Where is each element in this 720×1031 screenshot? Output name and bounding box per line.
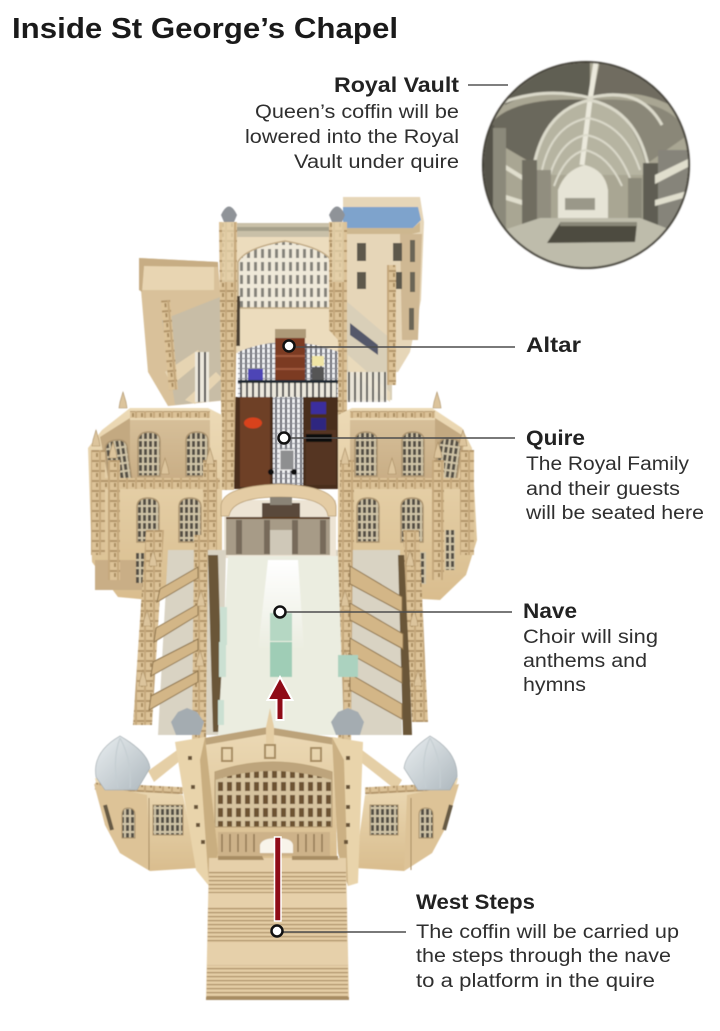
label: nave: Nave	[523, 600, 577, 623]
label: quire: Quire	[526, 427, 585, 450]
domes	[96, 708, 457, 790]
marker: altar	[284, 340, 515, 352]
label: quire: and their guests	[526, 479, 680, 500]
marker: nave	[274, 606, 512, 618]
label: west steps: West Steps	[416, 891, 535, 914]
arch and organ screen	[221, 484, 336, 558]
east right tower	[343, 197, 424, 402]
label: nave	[523, 600, 658, 696]
title: Inside St George’s Chapel	[12, 13, 398, 45]
label: royal vault: Royal Vault	[334, 74, 459, 97]
quire stalls and floor	[233, 397, 338, 489]
leader line: royal vault	[468, 84, 508, 86]
label: nave: anthems and	[523, 651, 647, 672]
label: nave: hymns	[523, 675, 586, 696]
label: west steps	[416, 891, 679, 992]
left transept	[88, 392, 222, 600]
illustration: royal vault roundel	[480, 60, 692, 272]
panel: chapel cutaway illustration	[88, 197, 477, 1000]
label: nave: Choir will sing	[523, 627, 658, 648]
west wing: left	[94, 778, 198, 871]
arrow: red arrow up the nave	[268, 677, 292, 720]
east left wing	[139, 258, 228, 406]
label: royal vault	[245, 74, 459, 173]
label: west steps: to a platform in the quire	[416, 971, 655, 992]
label: royal vault: Vault under quire	[294, 152, 459, 173]
right transept	[338, 392, 477, 600]
label: quire: The Royal Family	[526, 454, 690, 475]
right nave aisle and flying buttresses	[336, 530, 428, 790]
label: west steps: the steps through the nave	[416, 946, 671, 967]
nave floor	[218, 556, 358, 735]
marker: quire	[278, 432, 515, 444]
label: quire: will be seated here	[525, 503, 704, 524]
label: quire	[525, 427, 704, 524]
label: royal vault: Queen’s coffin will be	[255, 102, 459, 123]
label: west steps: The coffin will be carried up	[416, 922, 679, 943]
altar area	[238, 338, 339, 397]
apse gable and east window	[222, 223, 346, 353]
arrow: red line up the steps	[274, 837, 281, 921]
west wing: right	[355, 778, 459, 871]
west towers	[175, 737, 363, 886]
west front facade	[205, 708, 337, 860]
marker: west steps	[272, 926, 406, 936]
label: altar: Altar	[526, 334, 581, 357]
west steps	[206, 856, 349, 1000]
label: royal vault: lowered into the Royal	[245, 127, 459, 148]
apse flanking piers	[219, 206, 347, 490]
left nave aisle and flying buttresses	[133, 530, 226, 782]
